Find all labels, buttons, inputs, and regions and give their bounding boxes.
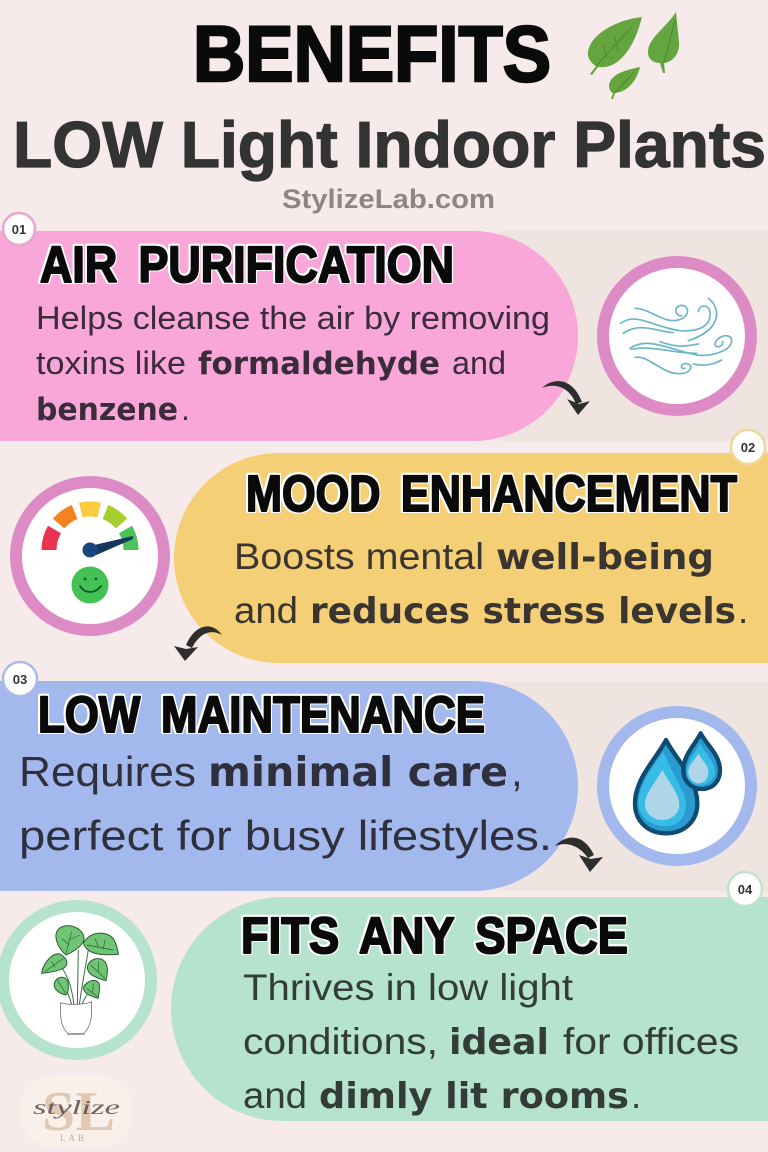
text block: air purification: Helps cleanse the air by removing <box>36 300 550 336</box>
text block: mood enhancement <box>234 536 748 632</box>
badge: 02 <box>731 430 765 464</box>
text block: fits any space: for offices <box>563 1021 739 1062</box>
icon: mood gauge <box>16 482 164 630</box>
text block: low maintenance: perfect for busy lifestyles. <box>19 812 552 859</box>
panel: air purification <box>0 231 578 441</box>
icon: green leaves <box>588 12 679 99</box>
arrow: panel 1 <box>542 381 590 415</box>
panel: fits any space <box>171 897 768 1121</box>
text block: low maintenance: , <box>511 748 523 795</box>
badge: 02: 02 <box>741 440 755 455</box>
icon: wind <box>603 262 751 410</box>
text block: mood enhancement: . <box>738 590 748 631</box>
text block: low maintenance: Requires <box>19 748 196 795</box>
logo: Stylize Lab: SL <box>42 1081 115 1143</box>
website credit: StylizeLab.com <box>282 184 495 214</box>
panel: mood enhancement <box>174 453 768 663</box>
badge: 03: 03 <box>13 672 27 687</box>
text block: air purification: and <box>452 345 506 381</box>
arrow: panel 3 <box>555 838 603 872</box>
text block: mood enhancement: Boosts mental <box>234 536 484 577</box>
badge: 04: 04 <box>738 882 753 897</box>
heading: air purification: AIR PURIFICATION <box>40 236 454 293</box>
text block: fits any space: ideal <box>449 1022 549 1063</box>
text block: mood enhancement: reduces stress levels <box>310 591 736 632</box>
text block: mood enhancement: well-being <box>496 537 714 578</box>
panel: low maintenance <box>0 681 578 891</box>
arrow: panel 2 <box>174 626 222 661</box>
text block: air purification: toxins like <box>36 345 186 381</box>
icon: potted plant <box>3 906 151 1054</box>
text block: fits any space: dimly lit rooms <box>319 1076 629 1117</box>
text block: air purification: . <box>181 391 190 427</box>
logo: Stylize Lab: LAB <box>60 1133 87 1143</box>
text block: fits any space: Thrives in low light <box>243 967 574 1008</box>
text block: fits any space: . <box>631 1075 641 1116</box>
heading: fits any space: FITS ANY SPACE <box>241 907 628 964</box>
logo: Stylize Lab: stylize <box>33 1097 120 1119</box>
text block: fits any space: and <box>243 1075 307 1116</box>
text block: fits any space <box>243 967 739 1117</box>
subtitle: LOW Light Indoor Plants: LOW Light Indoor Plants <box>13 108 766 181</box>
icon: water drops <box>603 712 751 860</box>
badge: 01 <box>3 213 35 245</box>
text block: air purification <box>36 300 550 428</box>
badge: 03 <box>3 662 37 696</box>
badge: 01: 01 <box>12 222 26 237</box>
logo: Stylize Lab <box>20 1075 133 1148</box>
text block: fits any space: conditions, <box>243 1021 438 1062</box>
badge: 04 <box>728 872 762 906</box>
text block: low maintenance: minimal care <box>208 748 508 796</box>
heading: low maintenance: LOW MAINTENANCE <box>38 686 485 743</box>
text block: air purification: benzene <box>36 392 178 428</box>
text block: low maintenance <box>19 748 552 859</box>
title: BENEFITS: BENEFITS <box>193 9 551 98</box>
text block: air purification: formaldehyde <box>198 346 440 382</box>
text block: mood enhancement: and <box>234 590 298 631</box>
